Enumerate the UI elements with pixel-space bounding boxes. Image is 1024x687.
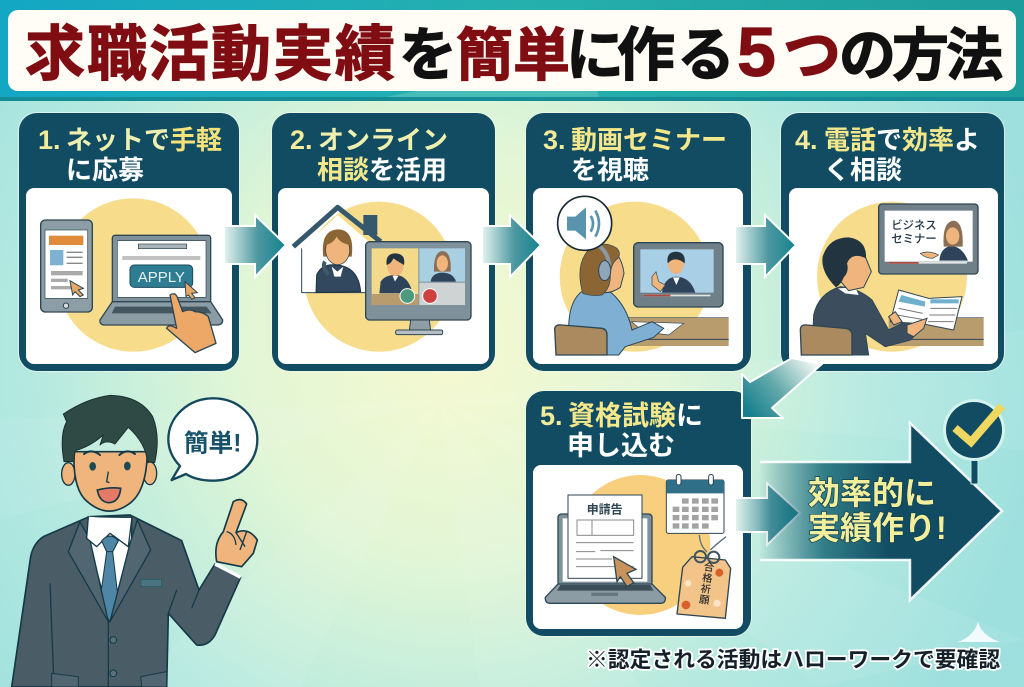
title: 求 xyxy=(25,21,85,88)
title: 方 xyxy=(892,24,949,88)
illustration 4 xyxy=(800,202,984,355)
title: 実 xyxy=(273,21,333,88)
background rays xyxy=(0,330,1024,687)
result arrow with text xyxy=(760,423,1002,600)
heading 4: 4. xyxy=(795,125,818,155)
arrow: 2 to 3 xyxy=(482,215,541,277)
heading 5: 資格試験 xyxy=(568,401,676,431)
heading 2: オンライン xyxy=(318,125,448,155)
heading 4: 電話 xyxy=(824,125,876,155)
title: 法 xyxy=(946,24,1003,88)
speech bubble: 簡単! xyxy=(184,430,241,458)
heading 4: で効率よ xyxy=(876,125,980,155)
heading 1: に応募 xyxy=(66,155,144,185)
illustration 5: 申請告 xyxy=(587,501,623,516)
illustration 5: 合 xyxy=(703,560,716,574)
arrow: 1 to 2 xyxy=(224,215,286,277)
illustration 2 xyxy=(293,202,471,352)
footnote: ※認定される活動はハローワークで要確認 xyxy=(586,647,1000,672)
heading 1: 1. xyxy=(38,125,61,155)
heading 3: 動画セミナー xyxy=(571,125,727,155)
title: の xyxy=(839,24,896,88)
title: 績 xyxy=(335,21,395,88)
title xyxy=(8,10,1016,91)
panel 4: 電話で効率よく相談 xyxy=(780,112,1005,372)
character: businessman xyxy=(12,395,257,687)
panel 1: ネットで手軽に応募 xyxy=(18,112,240,372)
result arrow with text: 実績作り! xyxy=(808,510,947,546)
illustration 5 xyxy=(545,474,731,618)
illustration 4: セミナー xyxy=(891,233,937,246)
title: 単 xyxy=(513,24,570,88)
title: 作 xyxy=(617,23,675,88)
speech bubble xyxy=(168,398,257,481)
heading 5: 申し込む xyxy=(567,431,675,461)
arrow: 3 to 4 xyxy=(735,215,796,277)
panel 5: 資格試験に申し込む xyxy=(525,390,752,637)
illustration 5: 願 xyxy=(698,594,711,607)
title: 動 xyxy=(211,21,271,88)
heading 1: ネットで xyxy=(66,125,170,155)
title: つ xyxy=(783,23,841,88)
panel 3: 動画セミナーを視聴 xyxy=(525,112,752,372)
arrow: 5 to result xyxy=(735,483,800,545)
icon: sparkle xyxy=(958,622,1000,642)
illustration 5: 祈 xyxy=(700,582,712,596)
icon: check badge xyxy=(943,399,1005,484)
title: 簡 xyxy=(456,24,513,88)
illustration 3 xyxy=(555,196,729,355)
heading 2: 2. xyxy=(290,125,313,155)
illustration 4: ビジネス xyxy=(891,219,937,232)
heading 1: 手軽 xyxy=(170,125,222,155)
heading 2: を活用 xyxy=(369,155,447,185)
title: に xyxy=(566,23,624,88)
illustration 5: 格 xyxy=(701,571,714,585)
panel 2: オンライン相談を活用 xyxy=(271,112,496,372)
title: 5 xyxy=(737,13,776,91)
arrow: 4 to 5 xyxy=(742,358,822,418)
heading 5: に xyxy=(676,401,703,431)
illustration 1: APPLY xyxy=(138,269,185,286)
title: を xyxy=(399,23,457,88)
title: る xyxy=(677,23,735,88)
title: 活 xyxy=(149,21,209,88)
heading 3: 3. xyxy=(543,125,566,155)
heading 3: を視聴 xyxy=(571,155,649,185)
result arrow with text: 効率的に xyxy=(808,475,936,511)
illustration 1 xyxy=(41,198,223,353)
heading 4: く相談 xyxy=(824,155,902,185)
title: 職 xyxy=(87,21,147,88)
top band xyxy=(0,0,1024,101)
heading 5: 5. xyxy=(540,401,563,431)
heading 2: 相談 xyxy=(317,155,369,185)
